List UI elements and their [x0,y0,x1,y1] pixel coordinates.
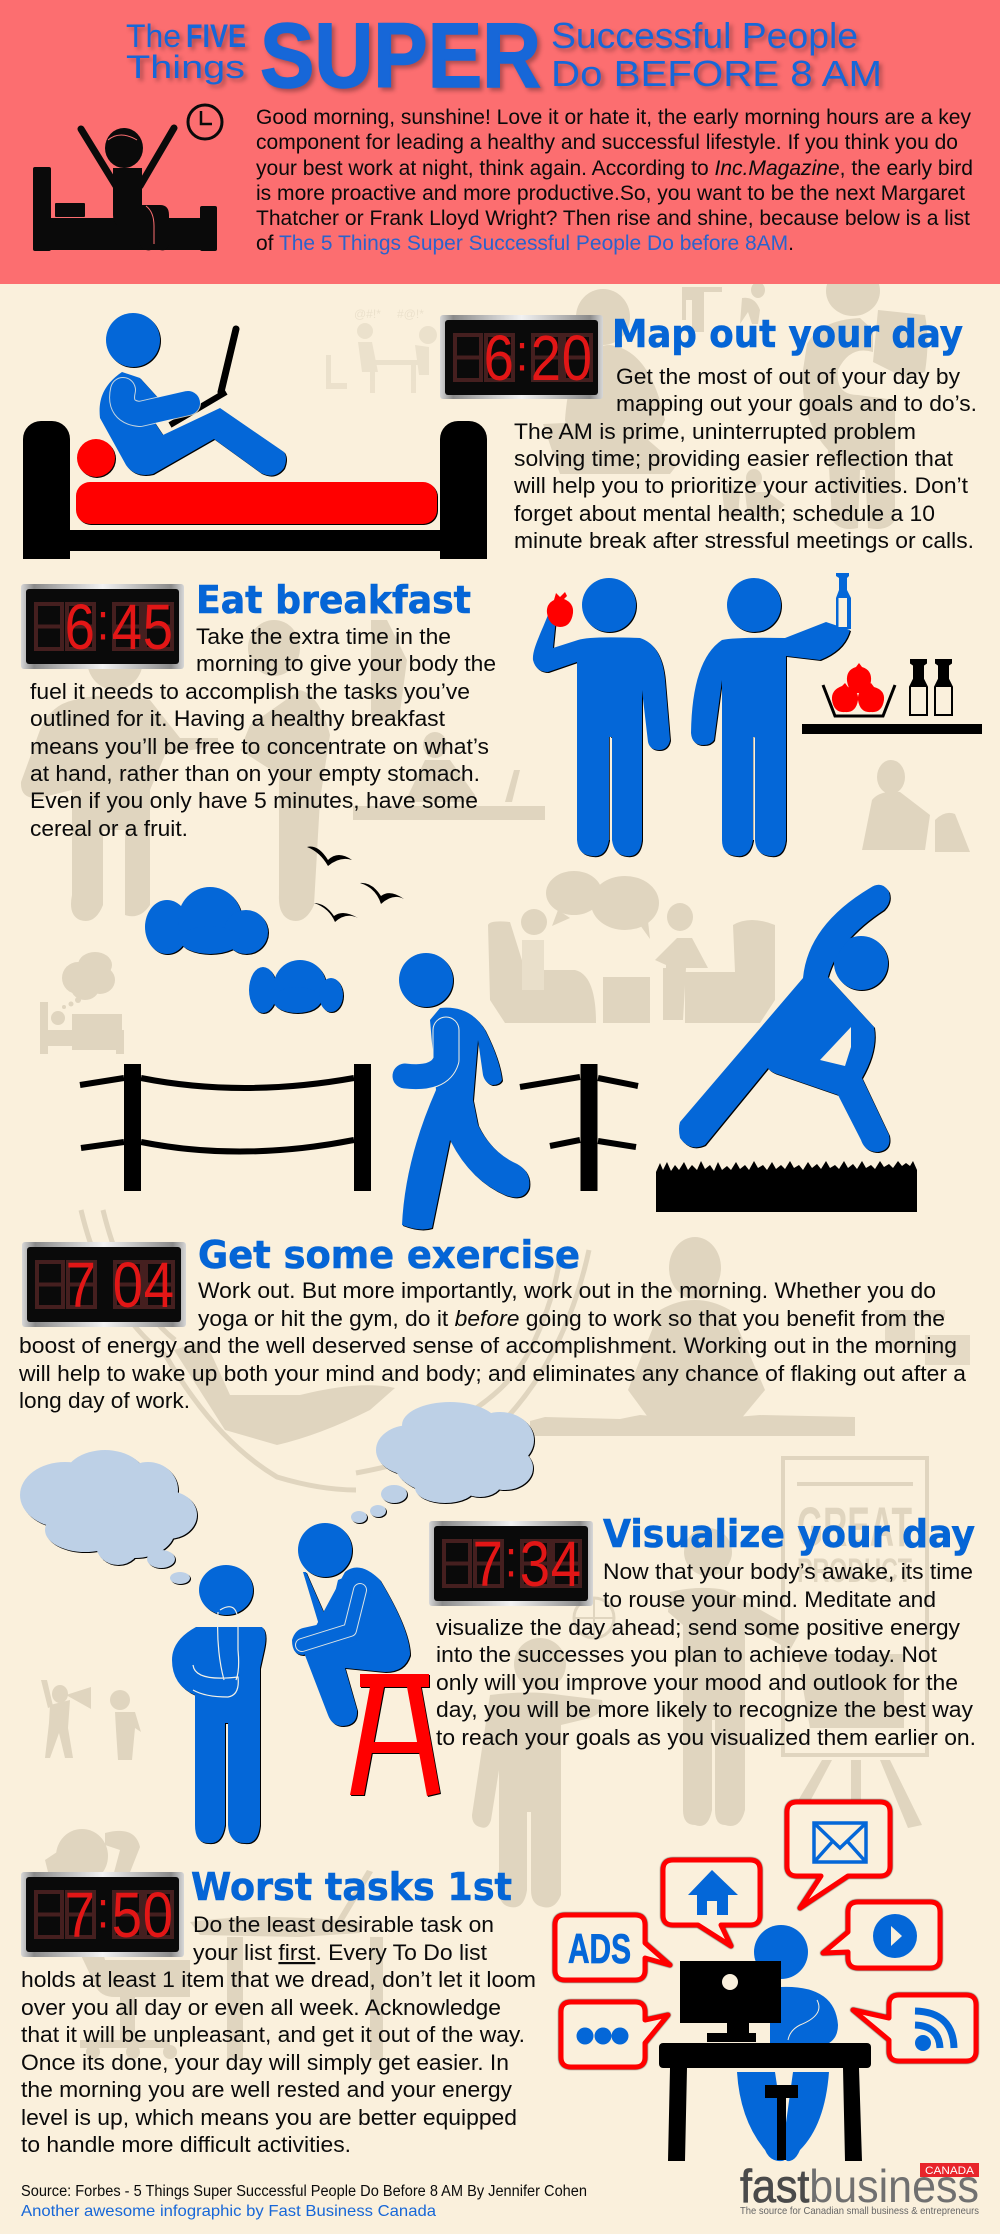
heading: visualize your day: Visualize your day [603,1512,975,1556]
ghost chairs [488,871,775,1023]
clock: 7:34: 4 [551,1528,581,1600]
speech bubble: ads: ADS [568,1925,631,1972]
background: ghost pictograms: @#!* [354,307,381,321]
clock: 6:45: 5 [143,591,173,663]
text: worst tasks 1st: holds at least 1 item that we dread, don’t let it loom [21,1967,536,1992]
ghost poster and presenters [472,1458,927,1908]
speech bubble: mail [787,1802,890,1908]
text: eat breakfast: cereal or a fruit. [30,816,188,841]
intro text: of The 5 Things Super Successful People Do before 8AM. [256,231,794,255]
title [126,5,882,107]
ghost pair beneath breakfast text [21,620,545,921]
intro text: Thatcher or Frank Lloyd Wright? Then rise and shine, because below is a list [256,206,970,230]
clock: 7:04 [22,1242,186,1327]
clock: 6:20 [440,315,603,399]
title: Do BEFORE 8 AM [551,53,882,94]
clock: 7:04: 7 [66,1249,96,1321]
speech bubble: dots [561,2002,668,2067]
text: map out your day: solving time; providing easier reflection that [514,446,953,471]
text: visualize your day [436,1559,976,1750]
clock: 6:45: 6 [65,591,95,663]
heading: worst tasks 1st: Worst tasks 1st [191,1865,512,1909]
ghost megaphone figures [41,1680,141,1760]
illustration: walking person [399,953,529,1229]
ghost poster and presenters: GREAT [797,1495,912,1558]
text: get some exercise [18,1278,967,1413]
credit line: Another awesome infographic by Fast Business Canada [21,2203,436,2220]
source line: Source: Forbes - 5 Things Super Successful People Do Before 8 AM By Jennifer Cohen [21,2183,587,2200]
text: worst tasks 1st: your list first. Every To Do list [193,1940,487,1965]
text: visualize your day: into the successes you plan to achieve today. Not [436,1642,937,1667]
header band [0,0,1000,284]
text: visualize your day: visualize the day ahead; send some positive energy [436,1615,960,1640]
illustration: breakfast shelf [802,660,982,734]
clock: 7:34 [429,1521,593,1606]
text: visualize your day: to reach your goals as you visualized them earlier on. [436,1725,976,1750]
illustration: person at computer desk [659,1925,871,2161]
text: worst tasks 1st: level is up, which means you are better equipped [21,2105,517,2130]
text: visualize your day: to rouse your mind. Meditate and [603,1587,936,1612]
logo: fastbusiness canada: The source for Canadian small business & entrepreneurs [740,2205,979,2217]
clock: 6:20: 0 [562,322,592,394]
text: visualize your day: only will you improve your mood and outlook for the [436,1670,958,1695]
clock: 6:45 [21,584,184,669]
text: eat breakfast: Even if you only have 5 minutes, have some [30,788,478,813]
section 1 illustration: person with laptop on bed [23,313,487,559]
heading: get some exercise: Get some exercise [198,1233,580,1277]
text: worst tasks 1st: Do the least desirable task on [193,1912,494,1937]
clock: 7:04: 0 [113,1249,143,1321]
text: eat breakfast: outlined for it. Having a healthy breakfast [30,706,445,731]
logo: fastbusiness canada: CANADA [925,2165,975,2177]
intro text [256,105,973,255]
intro text: Good morning, sunshine! Love it or hate it, the early morning hours are a key [256,105,971,129]
text: map out your day: will help you to prioritize your activities. Don’t [513,473,968,498]
clock: 6:20: : [516,324,528,382]
title: Things [126,49,245,85]
text: worst tasks 1st: that it will be unpleasant, and get it out of the way. [21,2022,525,2047]
clock: 7:50: : [97,1881,109,1939]
clock: 7:04: 4 [144,1249,174,1321]
illustration: person holding a bottle [691,573,851,856]
text: get some exercise: Work out. But more importantly, work out in the morning. Whether you do [198,1278,936,1303]
clock: 7:34: : [505,1530,517,1588]
heading: eat breakfast: Eat breakfast [196,578,471,622]
clock: 6:45: : [97,593,109,651]
illustration: standing thinker [172,1565,266,1843]
text: visualize your day: Now that your body’s awake, its time [603,1559,973,1584]
speech bubble: play [823,1902,940,1968]
text: worst tasks 1st: over you all day or even all week. Acknowledge [21,1995,501,2020]
text: map out your day: mapping out your goals and to do’s. [616,391,977,416]
ghost poster and presenters: PRODUCT [797,1552,912,1590]
clock: 7:34: 3 [520,1528,550,1600]
intro text: component for leading a healthy and successful lifestyle. If you think you do [256,130,958,154]
illustration: fence [80,1064,638,1191]
clock: 6:20: 6 [484,322,514,394]
text: worst tasks 1st: to handle more difficult activities. [21,2132,351,2157]
clock: 7:50: 7 [65,1879,95,1951]
illustration: person eating an apple [533,578,670,856]
text: map out your day: forget about mental health; schedule a 10 [514,501,935,526]
text: get some exercise: long day of work. [19,1388,190,1413]
clock: 7:50 [21,1872,184,1957]
text: get some exercise: will help to wake up both your mind and body; and eliminates any chance of flaking out after a [18,1361,967,1386]
text: map out your day: Get the most of out of your day by [616,364,960,389]
text: eat breakfast: morning to give your body the [196,651,496,676]
speech bubble: ads [555,1915,670,1980]
title: SUPER [260,5,541,107]
illustration: seated thinker on stool [292,1523,440,1796]
title: The [126,18,181,54]
icon: person waking in bed [33,105,222,251]
text: visualize your day: day, you will be more likely to recognize the best way [436,1697,973,1722]
text: eat breakfast: means you’ll be free to concentrate on what’s [30,734,489,759]
title: Successful People [551,15,858,56]
illustration: clouds [145,887,343,1013]
clock: 7:34: 7 [473,1528,503,1600]
heading: map out your day: Map out your day [612,312,963,356]
clock: 7:50: 5 [112,1879,142,1951]
background: ghost pictograms: #@!* [397,307,424,321]
clock: 6:45: 4 [112,591,142,663]
text: map out your day [513,364,977,553]
text: get some exercise: yoga or hit the gym, do it before going to work so that you benefit from the [198,1306,945,1331]
illustration: thought cloud right [351,1402,534,1523]
text: worst tasks 1st: the morning you are well rested and your energy [21,2077,512,2102]
text: eat breakfast: fuel it needs to accomplish the tasks you’ve [30,679,470,704]
intro text: is more proactive and more productive.So, you want to be the next Margaret [256,181,965,205]
text: map out your day: The AM is prime, uninterrupted problem [514,419,916,444]
text: eat breakfast: at hand, rather than on your empty stomach. [30,761,480,786]
text: get some exercise: boost of energy and the well deserved sense of accomplishment. Working out in the morning [19,1333,957,1358]
clock: 6:20: 2 [531,322,561,394]
ghost yoga and meditation [81,1210,589,1490]
background: ghost pictograms [21,266,970,2060]
ghost figure behind worst tasks [45,1829,383,2060]
illustration: person stretching [679,885,890,1152]
text: worst tasks 1st: Once its done, your day will simply get easier. In [21,2050,509,2075]
ghost bed and thought cloud [40,952,124,1054]
speech bubble: home [663,1860,760,1946]
title: FIVE [186,18,246,54]
text: eat breakfast: Take the extra time in the [196,624,451,649]
clock: 7:50: 0 [143,1879,173,1951]
text: eat breakfast [30,624,496,841]
text: map out your day: minute break after stressful meetings or calls. [514,528,974,553]
illustration: birds [307,847,404,922]
speech bubble: rss [853,1995,976,2061]
illustration: thought cloud left [20,1450,197,1584]
text: worst tasks 1st [21,1912,536,2157]
illustration: grass [656,1161,917,1212]
intro text: your best work at night, think again. According to Inc.Magazine, the early bird [256,156,973,180]
logo: fastbusiness canada: fastbusiness [740,2160,979,2212]
